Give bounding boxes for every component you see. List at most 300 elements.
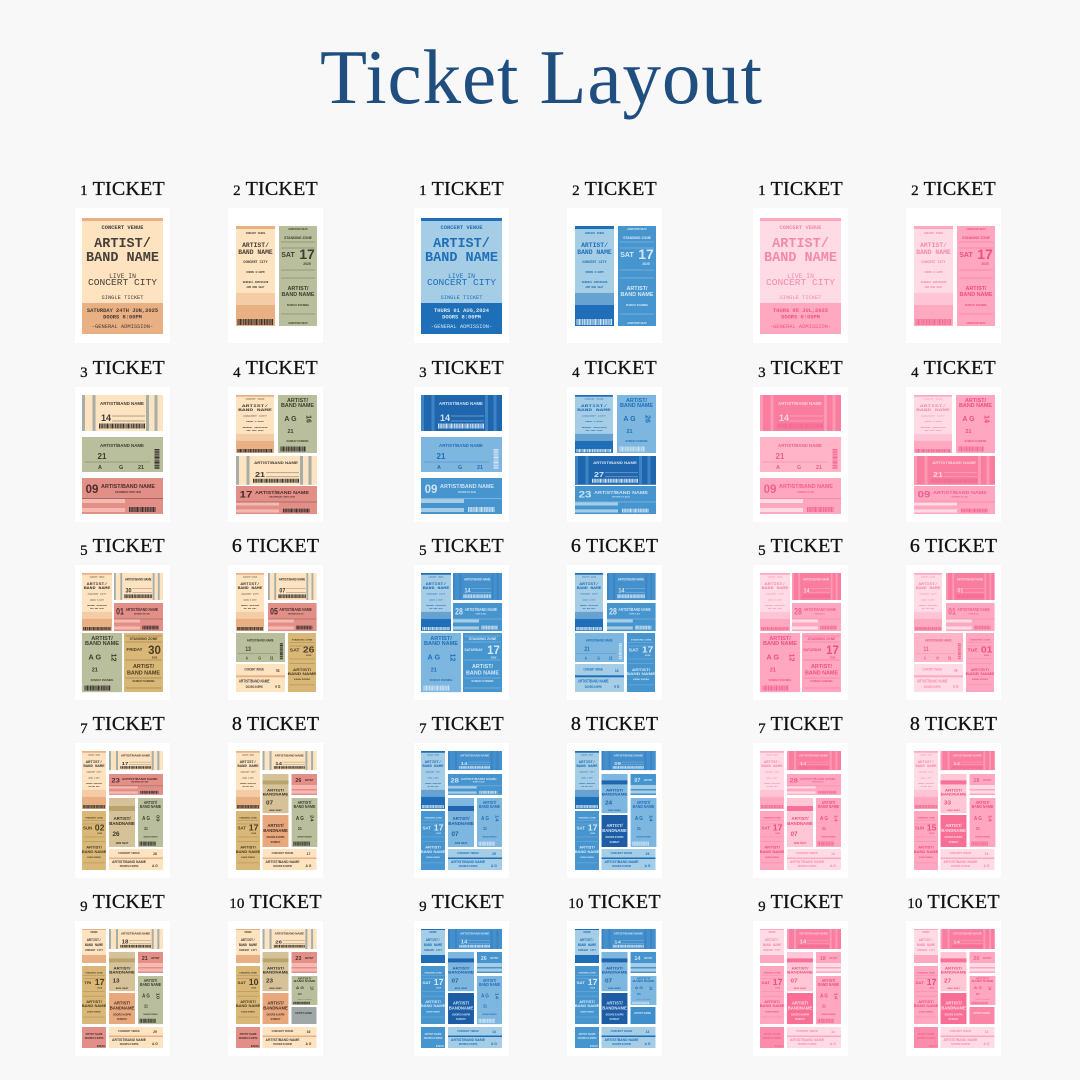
ticket: banded: 33 [944, 801, 951, 806]
ticket: mid small: ARTIST NAME [917, 1033, 935, 1036]
ticket: pale wide: ARTIST/BAND NAME [605, 860, 639, 864]
card [567, 387, 662, 522]
ticket: standing: SAT [915, 980, 924, 985]
ticket: tall: ARTIST/ [430, 636, 452, 642]
card [414, 387, 509, 522]
ticket: pale wide: CONCERT VENUE [922, 667, 942, 672]
ticket: standing: STANDING ZONE [917, 817, 935, 820]
ticket: red: ARTIST/BAND NAME [122, 777, 158, 781]
ticket: tall: BAND NAME [620, 403, 653, 409]
ticket: dark: ARTIST/ [606, 1001, 623, 1006]
ticket: green tall: 21 [298, 826, 302, 831]
ticket: stub: ARTIST/BAND NAME [953, 932, 982, 935]
label: 10 ticket: 10 TICKET [568, 891, 661, 913]
ticket: tall: ARTIST/ [976, 799, 990, 805]
ticket: venue: CONCERT CITY [582, 261, 608, 265]
ticket: single: SINGLE TICKET [779, 295, 822, 301]
ticket: stub: ARTIST/BAND NAME [778, 401, 822, 406]
ticket: standing: 2025 [436, 833, 442, 835]
ticket: small red: 21 [142, 956, 148, 962]
ticket: mid: 09 [764, 484, 776, 496]
panel: pink 2 ticket [906, 178, 1001, 343]
ticket: standing: SUNDAY EVENING [965, 304, 987, 307]
ticket: small mid: 07 [634, 778, 640, 784]
panel: blue 10 ticket [567, 891, 662, 1056]
ticket: khaki [262, 952, 289, 991]
panel: amber 7 ticket [75, 713, 170, 878]
ticket: grey [292, 1007, 316, 1024]
ticket: tan: SUN [83, 825, 92, 830]
ticket: banded: ADM SEAT [608, 809, 622, 812]
ticket: single: LIVE IN [109, 273, 136, 280]
ticket: standing: 17 [588, 823, 598, 832]
ticket: standing: ARTIST/ [579, 845, 596, 850]
ticket: standing: 2025 [984, 655, 990, 657]
ticket: standing: BAND NAME [621, 292, 654, 298]
ticket: pale wide: CONCERT VENUE [583, 667, 603, 672]
ticket: pale wide: ARTIST/BAND NAME [605, 1038, 639, 1042]
ticket: red: 01 [116, 607, 124, 617]
ticket: standing [575, 966, 600, 1024]
label: 4 ticket: TICKET [919, 357, 996, 379]
ticket: stub [262, 751, 317, 770]
ticket: pale wide [787, 849, 841, 870]
ticket: green tall: SUNDAY EVENING [297, 835, 312, 839]
ticket: venue: DOORS 8:00PM [244, 599, 256, 601]
ticket: standing: ADM ROW SEAT [627, 228, 647, 231]
ticket: tan: STANDING ZONE [239, 817, 257, 820]
ticket: short venue [575, 929, 599, 963]
ticket: venue: CONCERT VENUE [924, 232, 944, 235]
ticket: mid tone: ARTIST NAME [634, 1012, 651, 1015]
ticket: tan: STANDING ZONE [239, 972, 257, 974]
ticket: small red [138, 952, 163, 973]
label: 3 ticket: TICKET [427, 357, 504, 379]
ticket: tan: SUNDAY EVENING [87, 856, 102, 859]
ticket: banded: ADM SEAT [794, 987, 807, 990]
ticket: short venue [236, 929, 260, 963]
ticket: stub: ARTIST/BAND NAME [460, 754, 490, 757]
ticket: tall: BAND NAME [479, 804, 500, 809]
ticket: deep [941, 815, 966, 847]
ticket: banded [602, 774, 628, 813]
label: 9 ticket: TICKET [766, 891, 843, 913]
ticket: standing: STANDING ZONE [284, 236, 313, 240]
ticket: standing: SAT [761, 980, 770, 985]
ticket: tall [477, 798, 502, 847]
ticket: standing [802, 633, 841, 692]
ticket: single: LIVE IN [787, 273, 814, 280]
ticket: pale wide: CONCERT VENUE [796, 1030, 818, 1033]
label: 8 ticket: 8 TICKET [910, 713, 997, 735]
ticket: light: 21 [584, 647, 590, 654]
ticket: khaki: ARTIST/ [267, 966, 285, 970]
ticket: tall: 21 [483, 826, 488, 831]
ticket: tall: 12 [787, 654, 795, 661]
ticket: green tall: ARTIST/ [287, 398, 308, 404]
ticket: tall: A G [820, 993, 828, 1000]
ticket: venue: BAND NAME [577, 408, 611, 413]
card [753, 208, 848, 343]
panel: amber 6 ticket [228, 535, 323, 700]
ticket: venue [236, 395, 274, 453]
ticket: light: ARTIST/BAND NAME [925, 638, 951, 642]
ticket: stub: 26 [275, 940, 282, 945]
ticket: tall [956, 395, 995, 453]
ticket: light [421, 437, 502, 472]
ticket: standing [914, 811, 939, 870]
ticket: venue: BAND NAME [916, 249, 951, 256]
ticket: venue: CONCERT VENUE [582, 577, 596, 579]
ticket: pale wide: A G [953, 683, 958, 689]
ticket: standing: ARTIST/ [425, 845, 442, 850]
ticket: standing [957, 226, 995, 326]
ticket: pale wide [787, 1027, 841, 1048]
ticket: standing: ARTIST/ [918, 845, 935, 850]
ticket: standing: BAND NAME [966, 671, 995, 676]
panel: pink 8 ticket [906, 713, 1001, 878]
ticket: single [760, 218, 841, 334]
ticket: green tall: SUNDAY EVENING [286, 440, 309, 443]
card [567, 208, 662, 343]
ticket: tan: SAT [290, 648, 300, 652]
ticket: venue: GENERAL ADMISSION [243, 427, 268, 429]
ticket: venue: CONCERT CITY [766, 593, 785, 595]
ticket: tan: 17 [249, 823, 259, 832]
ticket: light [914, 633, 963, 662]
ticket: stub [940, 751, 995, 770]
label: 7 ticket: TICKET [88, 713, 165, 735]
ticket: standing: ARTIST/ [627, 286, 648, 292]
ticket: red: ARTIST/BAND NAME [255, 490, 310, 496]
ticket: pale wide: 29 [492, 852, 496, 856]
ticket: venue: ARTIST/ [918, 760, 935, 765]
label: 3 ticket: TICKET [88, 357, 165, 379]
ticket: venue: GENERAL ADMISSION [241, 604, 259, 607]
ticket: tall: SUNDAY EVENING [964, 440, 987, 443]
ticket: light: ARTIST/BAND NAME [439, 443, 483, 448]
ticket: venue: ADM ROW SEAT [246, 286, 265, 289]
ticket: peach wide: A G [152, 864, 158, 868]
ticket: green tall [292, 798, 317, 847]
ticket: mid [448, 774, 502, 795]
ticket: venue: CONCERT CITY [765, 771, 780, 773]
label: 5 ticket: TICKET [427, 535, 504, 557]
ticket: green tall: 21 [92, 668, 98, 674]
ticket: short venue: BAND NAME [578, 944, 596, 948]
ticket: venue: BAND NAME [761, 765, 783, 769]
ticket: standing: 2025 [929, 988, 935, 990]
ticket: red small [82, 1027, 106, 1048]
label: 4 ticket: TICKET [580, 357, 657, 379]
ticket: standing: SATURDAY [464, 648, 483, 652]
ticket: tall: A G [767, 654, 779, 662]
ticket: mid small: ARTIST NAME [578, 1033, 596, 1036]
ticket: red small: ARTIST NAME [239, 1033, 257, 1036]
label: 7 ticket: TICKET [427, 713, 504, 735]
ticket: stub: 14 [953, 761, 960, 767]
ticket: pale wide: 14 [615, 667, 619, 673]
label: 6 ticket: 6 TICKET [910, 535, 997, 557]
ticket: stub: 21 [933, 471, 944, 479]
ticket: stub: ARTIST/BAND NAME [593, 460, 637, 465]
panel: blue 8 ticket [567, 713, 662, 878]
ticket: green tall: 24 [309, 815, 314, 822]
ticket: tall: BAND NAME [818, 804, 839, 809]
ticket: tall: A G [820, 815, 828, 822]
ticket: dark: DOORS 8:00PM [452, 1013, 470, 1016]
ticket: pale wide [448, 1027, 502, 1048]
ticket: tall: SUNDAY EVENING [482, 835, 497, 839]
ticket: single: DOORS 8:00PM [103, 314, 142, 320]
ticket: standing: SAT [422, 980, 431, 985]
ticket: venue: ADM ROW SEAT [88, 785, 100, 788]
ticket: venue: CONCERT VENUE [246, 232, 266, 235]
ticket: venue: CONCERT CITY [582, 415, 606, 417]
ticket: mid: THURS 05 JUL [815, 614, 825, 616]
card [228, 565, 323, 700]
ticket: venue: ADM ROW SEAT [585, 430, 604, 432]
ticket: pale wide: A G [491, 1042, 497, 1046]
ticket: tan: SUNDAY EVENING [87, 1010, 102, 1013]
ticket: stub: ARTIST/BAND NAME [100, 401, 144, 406]
ticket: dark: SUNDAY [610, 1018, 620, 1021]
ticket: green short [292, 976, 317, 1005]
ticket: banded [940, 774, 967, 813]
ticket: dark: BANDNAME [602, 828, 627, 833]
ticket: standing: SATURDAY [803, 648, 822, 652]
ticket: banded: 24 [605, 801, 613, 806]
ticket: venue: ARTIST/ [920, 242, 947, 249]
ticket: light [575, 633, 624, 662]
ticket: red: SATURDAY 24TH JUN [269, 496, 295, 499]
ticket: tan: ARTIST/ [293, 667, 312, 672]
panel: pink 1 ticket [753, 178, 848, 343]
ticket: peach wide: 16 [307, 1030, 310, 1034]
ticket: mid: 28 [789, 777, 798, 785]
ticket: small red [292, 774, 317, 795]
ticket: venue: GENERAL ADMISSION [582, 281, 608, 284]
ticket: green tall: A G [142, 815, 150, 822]
ticket: red: 05 [270, 607, 278, 617]
ticket: short venue: BAND NAME [917, 944, 935, 948]
ticket: standing: 17 [773, 823, 783, 832]
ticket: tall [617, 395, 656, 453]
ticket: tall: A G [481, 993, 489, 1000]
ticket: small mid: ARTIST [644, 957, 653, 960]
ticket: green tall: 09 [155, 815, 160, 822]
ticket: tan: 2025 [97, 988, 103, 990]
ticket: stub: ARTIST/BAND NAME [803, 577, 829, 582]
ticket: small mid: ARTIST [490, 957, 499, 960]
ticket: pale wide: ARTIST/BAND NAME [451, 1038, 486, 1042]
ticket: standing: SAT [620, 252, 634, 259]
ticket: tall: ARTIST/ [483, 977, 497, 983]
ticket: venue [575, 751, 599, 809]
ticket: tall: 14 [494, 815, 499, 822]
ticket: small mid [970, 952, 995, 973]
ticket: stub: ARTIST/BAND NAME [125, 577, 151, 582]
ticket: deep: ARTIST/ [792, 1001, 809, 1006]
ticket: mid: THURS 05 JUL [968, 614, 979, 616]
ticket: short venue: CONCERT CITY [917, 949, 935, 952]
ticket: tan: STANDING ZONE [85, 817, 103, 820]
ticket: mid: 23 [579, 491, 592, 500]
panel: pink 3 ticket [753, 357, 848, 522]
ticket: orange: SUNDAY [117, 1018, 127, 1021]
ticket: green: AG21 [98, 465, 144, 471]
ticket: banded: ARTIST/ [945, 788, 963, 792]
ticket: standing: ARTIST/ [918, 999, 935, 1004]
column group: amber tickets [75, 178, 323, 1056]
ticket: standing: BAND NAME [914, 849, 939, 854]
ticket: deep: BANDNAME [788, 1005, 812, 1010]
ticket: pale wide: CONCERT VENUE [457, 1030, 479, 1033]
label: 2 ticket: 2 TICKET [911, 178, 996, 200]
card [414, 565, 509, 700]
ticket: stub: 09 [614, 761, 621, 767]
ticket: standing: 17 [977, 246, 993, 262]
ticket: khaki: ARTIST/ [113, 966, 132, 970]
ticket: venue [575, 573, 603, 631]
ticket: venue: DOORS 8:00PM [88, 777, 100, 779]
ticket: peach wide: DOORS 8:00PM [273, 865, 292, 868]
ticket: orange: ARTIST/ [114, 1001, 131, 1006]
ticket: standing [618, 226, 656, 326]
ticket: standing: STANDING ZONE [631, 639, 652, 642]
ticket: red small: DOORS 8:00PM [239, 1037, 257, 1040]
ticket: mid: 01 [948, 607, 956, 617]
ticket: tan: SAT [237, 825, 246, 830]
ticket: single: BAND NAME [425, 251, 498, 266]
ticket: stub: 14 [440, 413, 450, 423]
ticket: small mid: 26 [481, 956, 487, 962]
ticket: tan: 02 [95, 823, 105, 832]
ticket: standing: SUNDAY EVENING [765, 1010, 780, 1013]
ticket: dark: ARTIST/ [453, 1001, 470, 1006]
ticket: peach wide [262, 849, 316, 870]
ticket: peach wide: ARTIST/BAND NAME [112, 860, 147, 864]
ticket: standing [760, 811, 785, 870]
ticket: short venue: ARTIST/ [426, 938, 440, 943]
ticket: peach wide: A G [275, 683, 280, 689]
ticket: green tall [138, 798, 163, 847]
ticket: venue: CONCERT CITY [241, 771, 256, 773]
ticket: mid small: DOORS 8:00PM [917, 1037, 935, 1040]
label: 8 ticket: 8 TICKET [232, 713, 319, 735]
ticket: standing: STANDING ZONE [962, 236, 991, 240]
ticket: single: ARTIST/ [772, 237, 829, 252]
ticket: light: AN01 [924, 655, 952, 661]
ticket: standing: SUNDAY EVENING [765, 856, 780, 859]
ticket: tan: 2025 [97, 833, 103, 835]
ticket: small mid [477, 952, 502, 973]
ticket: tan: STANDING ZONE [85, 972, 103, 974]
label: 7 ticket: TICKET [766, 713, 843, 735]
panel: pink 6 ticket [906, 535, 1001, 700]
ticket: tall: A G [974, 816, 982, 822]
ticket: standing: ADM ROW SEAT [288, 228, 308, 231]
ticket: tall: SUNDAY EVENING [821, 1013, 836, 1016]
ticket: venue: DOORS 8:00PM [922, 599, 934, 601]
ticket: tan: BAND NAME [82, 1003, 107, 1008]
ticket: venue: ADM ROW SEAT [924, 430, 943, 432]
ticket: stub: ARTIST/BAND NAME [932, 460, 976, 465]
ticket: single: CONCERT VENUE [779, 225, 822, 231]
ticket: venue [421, 573, 451, 631]
ticket: banded: 07 [790, 979, 798, 984]
ticket: standing: SUN [915, 825, 924, 830]
ticket: mid: 28 [794, 607, 802, 617]
ticket: mid [421, 478, 502, 514]
ticket: venue: ADM ROW SEAT [581, 785, 593, 788]
ticket: green tall: 21 [288, 429, 294, 435]
ticket: tall: BAND NAME [424, 641, 458, 647]
panel: amber 1 ticket [75, 178, 170, 343]
ticket: mid small [575, 1027, 599, 1048]
label: 5 ticket: TICKET [766, 535, 843, 557]
ticket: tall: BAND NAME [818, 981, 839, 987]
ticket: stub: 14 [461, 761, 467, 767]
ticket: orange: DOORS 8:00PM [113, 1013, 131, 1016]
ticket: single: ARTIST/ [433, 237, 490, 252]
ticket: dark [602, 815, 627, 847]
ticket: stub: 14 [464, 587, 471, 595]
ticket: tan: BAND NAME [236, 849, 261, 854]
ticket: mid [575, 486, 656, 514]
ticket: venue: DOORS 8:00PM [581, 777, 593, 779]
label: 3 ticket: 3 [80, 365, 88, 381]
ticket: venue: ADM ROW SEAT [924, 286, 943, 289]
ticket: green tall: 12 [109, 654, 117, 661]
ticket: banded: BANDNAME [787, 970, 813, 974]
ticket: single: CONCERT VENUE [101, 225, 144, 231]
ticket: tan [288, 633, 317, 692]
ticket: single [421, 218, 502, 334]
label: 1 ticket: 1 TICKET [80, 178, 165, 200]
ticket: tall: 14 [833, 993, 838, 999]
ticket: standing: ARTIST/ [579, 999, 596, 1004]
ticket: green tall: 21 [144, 826, 149, 831]
ticket: banded: ARTIST/ [791, 966, 810, 970]
ticket: red: SATURDAY 24TH JUN [288, 612, 304, 616]
ticket: standing: ADM ROW SEAT [627, 322, 647, 325]
ticket: small red: ARTIST [151, 957, 160, 960]
ticket: small mid [970, 774, 995, 795]
ticket: venue: CONCERT CITY [427, 593, 446, 595]
ticket: light: 21 [437, 452, 446, 461]
ticket: standing: 2025 [830, 656, 836, 660]
ticket: dark: ARTIST/ [606, 823, 623, 828]
ticket: green tall: A G [142, 993, 150, 1000]
ticket: khaki: 07 [266, 801, 273, 806]
ticket: venue: ARTIST/ [240, 760, 257, 765]
ticket: peach wide: CONCERT VENUE [244, 667, 264, 672]
ticket: venue: ARTIST/ [86, 760, 103, 765]
ticket: tall [421, 633, 461, 692]
ticket: venue: CONCERT CITY [919, 771, 934, 773]
ticket: banded: 07 [790, 831, 798, 838]
ticket: venue: CONCERT VENUE [242, 755, 254, 757]
ticket: pale wide: 14 [831, 1030, 835, 1034]
ticket: peach wide: ARTIST/BAND NAME [112, 1038, 147, 1042]
ticket: tall: 14 [833, 815, 838, 822]
card [75, 565, 170, 700]
ticket: tan: STANDING ZONE [130, 637, 158, 641]
ticket: short venue: CONCERT CITY [239, 949, 257, 952]
ticket: stub: ARTIST/BAND NAME [275, 754, 304, 757]
ticket: standing: BAND NAME [575, 849, 600, 854]
